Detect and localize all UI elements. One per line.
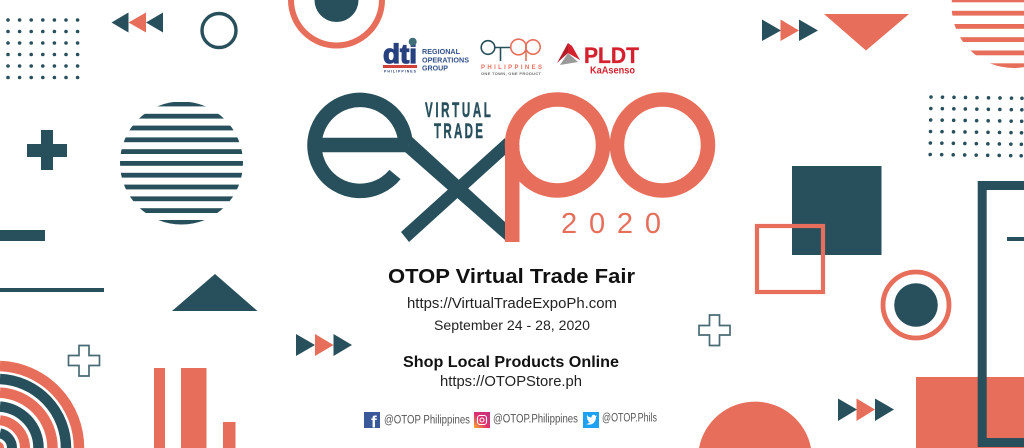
ring with dot: right [883, 272, 949, 338]
text: instagram handle: @OTOP.Philippines [493, 414, 578, 426]
ring: top left outline circle [202, 14, 236, 48]
logo: dti regional operations group: PHILIPPINES [384, 70, 417, 74]
logo: OTOP Philippines: ONE TOWN, ONE PRODUCT [481, 71, 542, 76]
letter o [617, 100, 708, 190]
logo: dti regional operations group: OPERATIONS [422, 55, 469, 64]
semicircle: coral bottom [699, 402, 811, 448]
square: coral outline [757, 226, 823, 292]
frame: dark outline right [982, 186, 1024, 442]
logo: dti regional operations group: dti [383, 39, 417, 69]
arrows: top left pointing left [112, 12, 163, 32]
triangle: coral pointing down [824, 14, 909, 50]
dot grid: right [928, 95, 1024, 158]
logo: dti regional operations group: REGIONAL [422, 47, 460, 56]
icon: outline plus right [699, 315, 730, 346]
text: website: https://VirtualTradeExpoPh.com [407, 296, 617, 312]
text: facebook handle: @OTOP Philippines [384, 414, 470, 426]
arrows: bottom right pointing right [838, 398, 894, 421]
logo: dti regional operations group [383, 38, 469, 74]
text: dates: September 24 - 28, 2020 [434, 318, 590, 333]
letter e [315, 100, 408, 191]
logo: dti regional operations group: GROUP [422, 64, 448, 72]
logo: PLDT KaAsenso [557, 43, 640, 76]
dash: right edge [1007, 237, 1024, 241]
line: left edge thin [0, 288, 104, 292]
text: year: 2020 [561, 208, 661, 240]
text: trade: TRADE [434, 119, 485, 143]
text: virtual: VIRTUAL [425, 98, 494, 122]
social handles row [364, 412, 657, 432]
striped circle: coral [945, 0, 1024, 68]
letter x [401, 137, 505, 242]
icon: outline plus left [68, 346, 100, 376]
logo: PLDT KaAsenso: KaAsenso [590, 66, 635, 76]
icon: facebook [364, 412, 380, 432]
block: coral bottom right [916, 377, 1024, 448]
striped circle: dark [115, 102, 250, 225]
icon: solid plus [27, 130, 67, 170]
icon: twitter [583, 412, 599, 428]
square: solid dark [792, 166, 882, 255]
triangle: dark pointing up [172, 274, 258, 311]
heading: Shop Local Products Online: Shop Local Products Online [403, 354, 619, 371]
text: twitter handle: @OTOP.Phils [602, 413, 657, 425]
arrows: centre left pointing right [296, 334, 352, 356]
arrows: top right pointing right [762, 20, 818, 41]
icon: facebook: f [371, 412, 377, 432]
title logo: Virtual Trade Expo [315, 98, 708, 242]
rainbow arcs: bottom left [0, 366, 79, 448]
dot grid: top left [6, 18, 79, 79]
logo: OTOP Philippines [481, 39, 542, 76]
logo: PLDT KaAsenso: PLDT [584, 43, 640, 68]
letter p [505, 100, 603, 242]
logo: OTOP Philippines: PHILIPPINES [481, 65, 542, 71]
icon: instagram [474, 412, 490, 428]
text: store url: https://OTOPStore.ph [440, 374, 582, 390]
bars: bottom left coral [154, 368, 236, 448]
ring with dot: top centre [291, 0, 382, 45]
bar: left edge thick [0, 230, 45, 241]
heading: OTOP Virtual Trade Fair: OTOP Virtual Trade Fair [388, 266, 635, 288]
